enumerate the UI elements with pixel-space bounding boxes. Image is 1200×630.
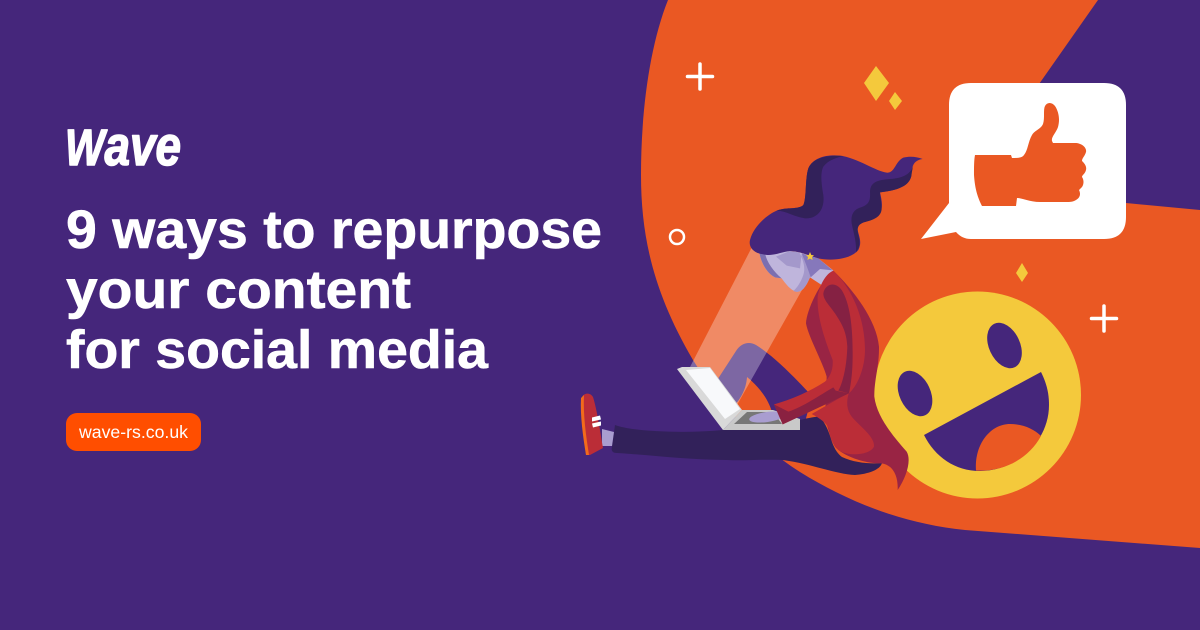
jacket red torso and sleeve (774, 271, 865, 424)
straight leg (612, 417, 882, 475)
title (66, 200, 602, 380)
face shadow left (759, 252, 782, 278)
shoe stripes (592, 416, 601, 428)
thumbs up icon (974, 103, 1086, 206)
face and neck (759, 251, 834, 292)
face mid shade (776, 251, 812, 292)
hair shadow right (851, 165, 913, 252)
website button (66, 413, 201, 451)
neck shadow (802, 253, 833, 277)
shoe sole (581, 395, 589, 455)
orange background shape (641, 0, 1200, 548)
logo: Wave (65, 114, 181, 177)
title: your content (66, 260, 411, 320)
bent leg (712, 343, 812, 422)
laughing emoji (874, 292, 1081, 498)
jacket sleeve shadow (774, 387, 849, 424)
jacket lower panel (812, 393, 874, 454)
emoji mouth (924, 372, 1049, 471)
woman with laptop (581, 155, 923, 490)
light beam from screen (690, 247, 802, 405)
title: 9 ways to repurpose (66, 200, 602, 260)
laptop keyboard (734, 412, 782, 424)
jacket dark outer (806, 271, 909, 490)
hand (748, 410, 786, 424)
laptop lid (677, 367, 742, 430)
emoji eyes (891, 317, 1029, 422)
shoe (582, 394, 603, 455)
laptop base (723, 410, 800, 430)
title: for social media (66, 320, 489, 380)
website button: wave-rs.co.uk (78, 422, 188, 442)
speech bubble with thumbs up (921, 83, 1126, 239)
earring (806, 252, 814, 260)
hair shadow left (777, 156, 843, 218)
sock (602, 429, 614, 446)
laptop screen (686, 368, 740, 419)
emoji tongue (976, 424, 1041, 471)
sparkles and decorations (670, 64, 1116, 331)
jacket inner fold (823, 284, 853, 393)
jacket (774, 271, 909, 490)
hair (750, 155, 923, 260)
